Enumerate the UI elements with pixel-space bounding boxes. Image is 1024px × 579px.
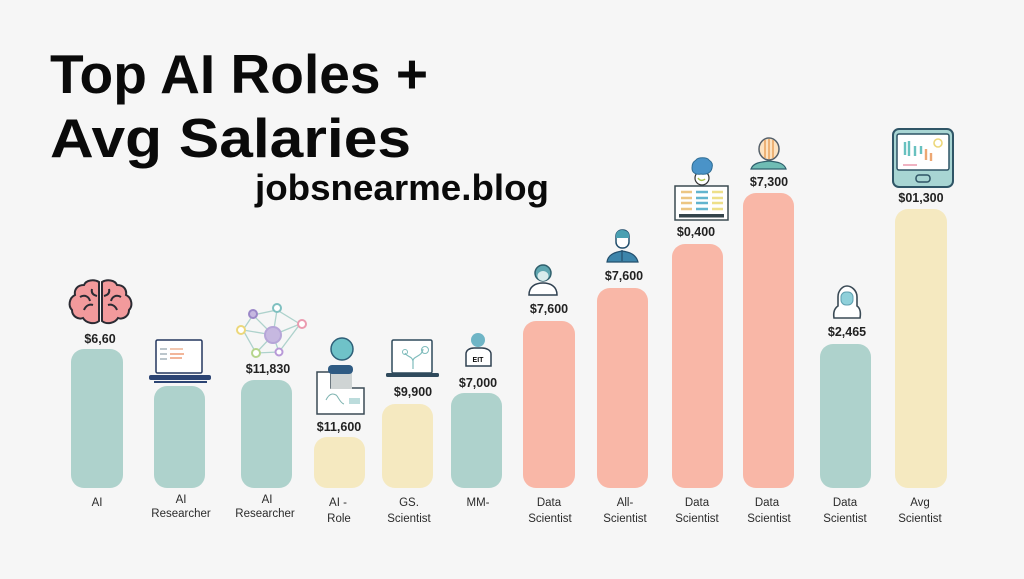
subtitle: website: jobsnearme.blog	[254, 167, 549, 208]
icon: laptop with graph	[386, 340, 439, 377]
bar 5	[382, 385, 433, 525]
bar 9: Scientist	[675, 513, 720, 525]
bar 8	[597, 269, 648, 525]
bar chart	[71, 175, 947, 525]
bar 5: $9,900	[394, 385, 432, 399]
bar 1	[71, 332, 123, 509]
title: Avg Salaries	[50, 107, 411, 169]
bar 9: $0,400	[677, 225, 715, 239]
bar 11: Scientist	[823, 513, 868, 525]
icon: person with data board	[675, 158, 728, 220]
bar 7	[523, 302, 575, 525]
bar 8: $7,600	[605, 269, 643, 283]
bar 9: Data	[685, 497, 710, 509]
bar 8: All-	[617, 497, 633, 509]
bar 10: Scientist	[747, 513, 792, 525]
bar 10: $7,300	[750, 175, 788, 189]
bar 2: AI	[176, 494, 186, 506]
bar 4: $11,600	[317, 420, 361, 434]
icon: person with mask	[466, 333, 491, 366]
bar 10	[743, 175, 794, 525]
icon: network	[237, 304, 306, 357]
icon: person with chart	[317, 338, 364, 414]
bar 12: Avg	[910, 497, 930, 509]
bar 3: AI	[262, 494, 272, 506]
title	[50, 43, 428, 169]
bar 4	[314, 420, 365, 525]
icon: person with headset	[751, 138, 786, 169]
icon: person in face shield	[834, 286, 860, 318]
bar 5: GS.	[399, 497, 419, 509]
bar 3: $11,830	[246, 362, 290, 376]
icon: person, data scientist	[529, 265, 557, 295]
bar 4: AI -	[329, 497, 347, 509]
bar 9	[672, 225, 723, 525]
bar 6	[451, 376, 502, 509]
bar 1: $6,60	[84, 332, 116, 346]
bar 4: Role	[327, 513, 351, 525]
bar 6: MM-	[466, 497, 490, 509]
bar 6: $7,000	[459, 376, 497, 390]
bar 7: Scientist	[528, 513, 573, 525]
bar 3	[235, 362, 295, 520]
bar 12: $01,300	[898, 191, 944, 205]
bar 12	[895, 191, 947, 525]
bar 2	[151, 386, 211, 520]
bar 8: Scientist	[603, 513, 648, 525]
bar 10: Data	[755, 497, 780, 509]
icon: tablet with chart	[893, 129, 953, 187]
bar 5: Scientist	[387, 513, 432, 525]
bar 7: Data	[537, 497, 562, 509]
bar 7: $7,600	[530, 302, 568, 316]
bar 12: Scientist	[898, 513, 943, 525]
icon: person in blue suit	[607, 230, 638, 262]
icon: laptop	[149, 340, 211, 383]
bar 11: Data	[833, 497, 858, 509]
icon: person with mask: EIT	[473, 357, 484, 364]
title: Top AI Roles +	[50, 43, 428, 105]
bar 11: $2,465	[828, 325, 866, 339]
bar 1: AI	[92, 497, 102, 509]
icon: brain	[70, 280, 131, 323]
bar 3: Researcher	[235, 508, 295, 520]
bar 2: Researcher	[151, 508, 211, 520]
bar 11	[820, 325, 871, 525]
